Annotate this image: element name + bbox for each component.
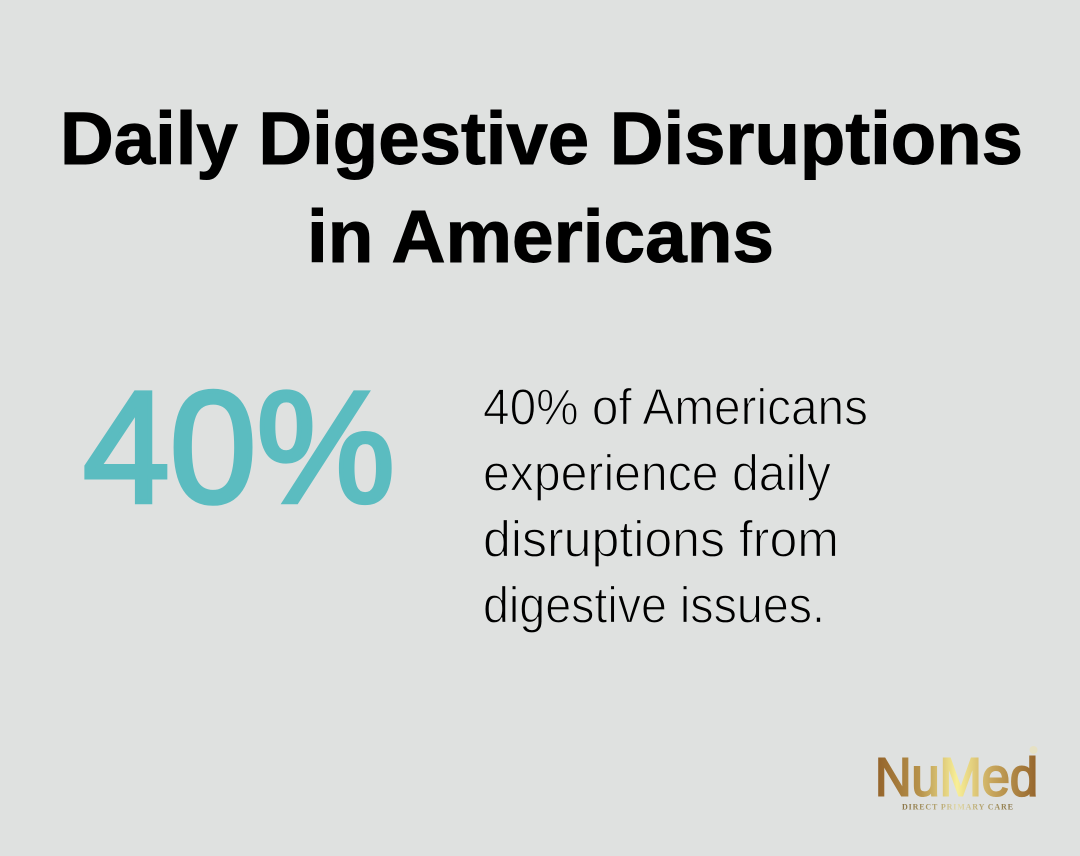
statistic description [483,378,868,634]
logo tagline: DIRECT PRIMARY CARE [902,802,1013,812]
logo wordmark: NuMed [875,748,1038,808]
logo: NuMed [875,746,1038,812]
big statistic: 40%: 40% [83,358,395,536]
statistic description: disruptions from [483,510,839,568]
logo seal [1030,746,1038,754]
statistic description: 40% of Americans [483,378,868,436]
title [60,97,1023,278]
title: in Americans [307,195,774,278]
title: Daily Digestive Disruptions [60,97,1023,180]
statistic description: digestive issues. [483,576,825,634]
statistic description: experience daily [483,444,831,502]
